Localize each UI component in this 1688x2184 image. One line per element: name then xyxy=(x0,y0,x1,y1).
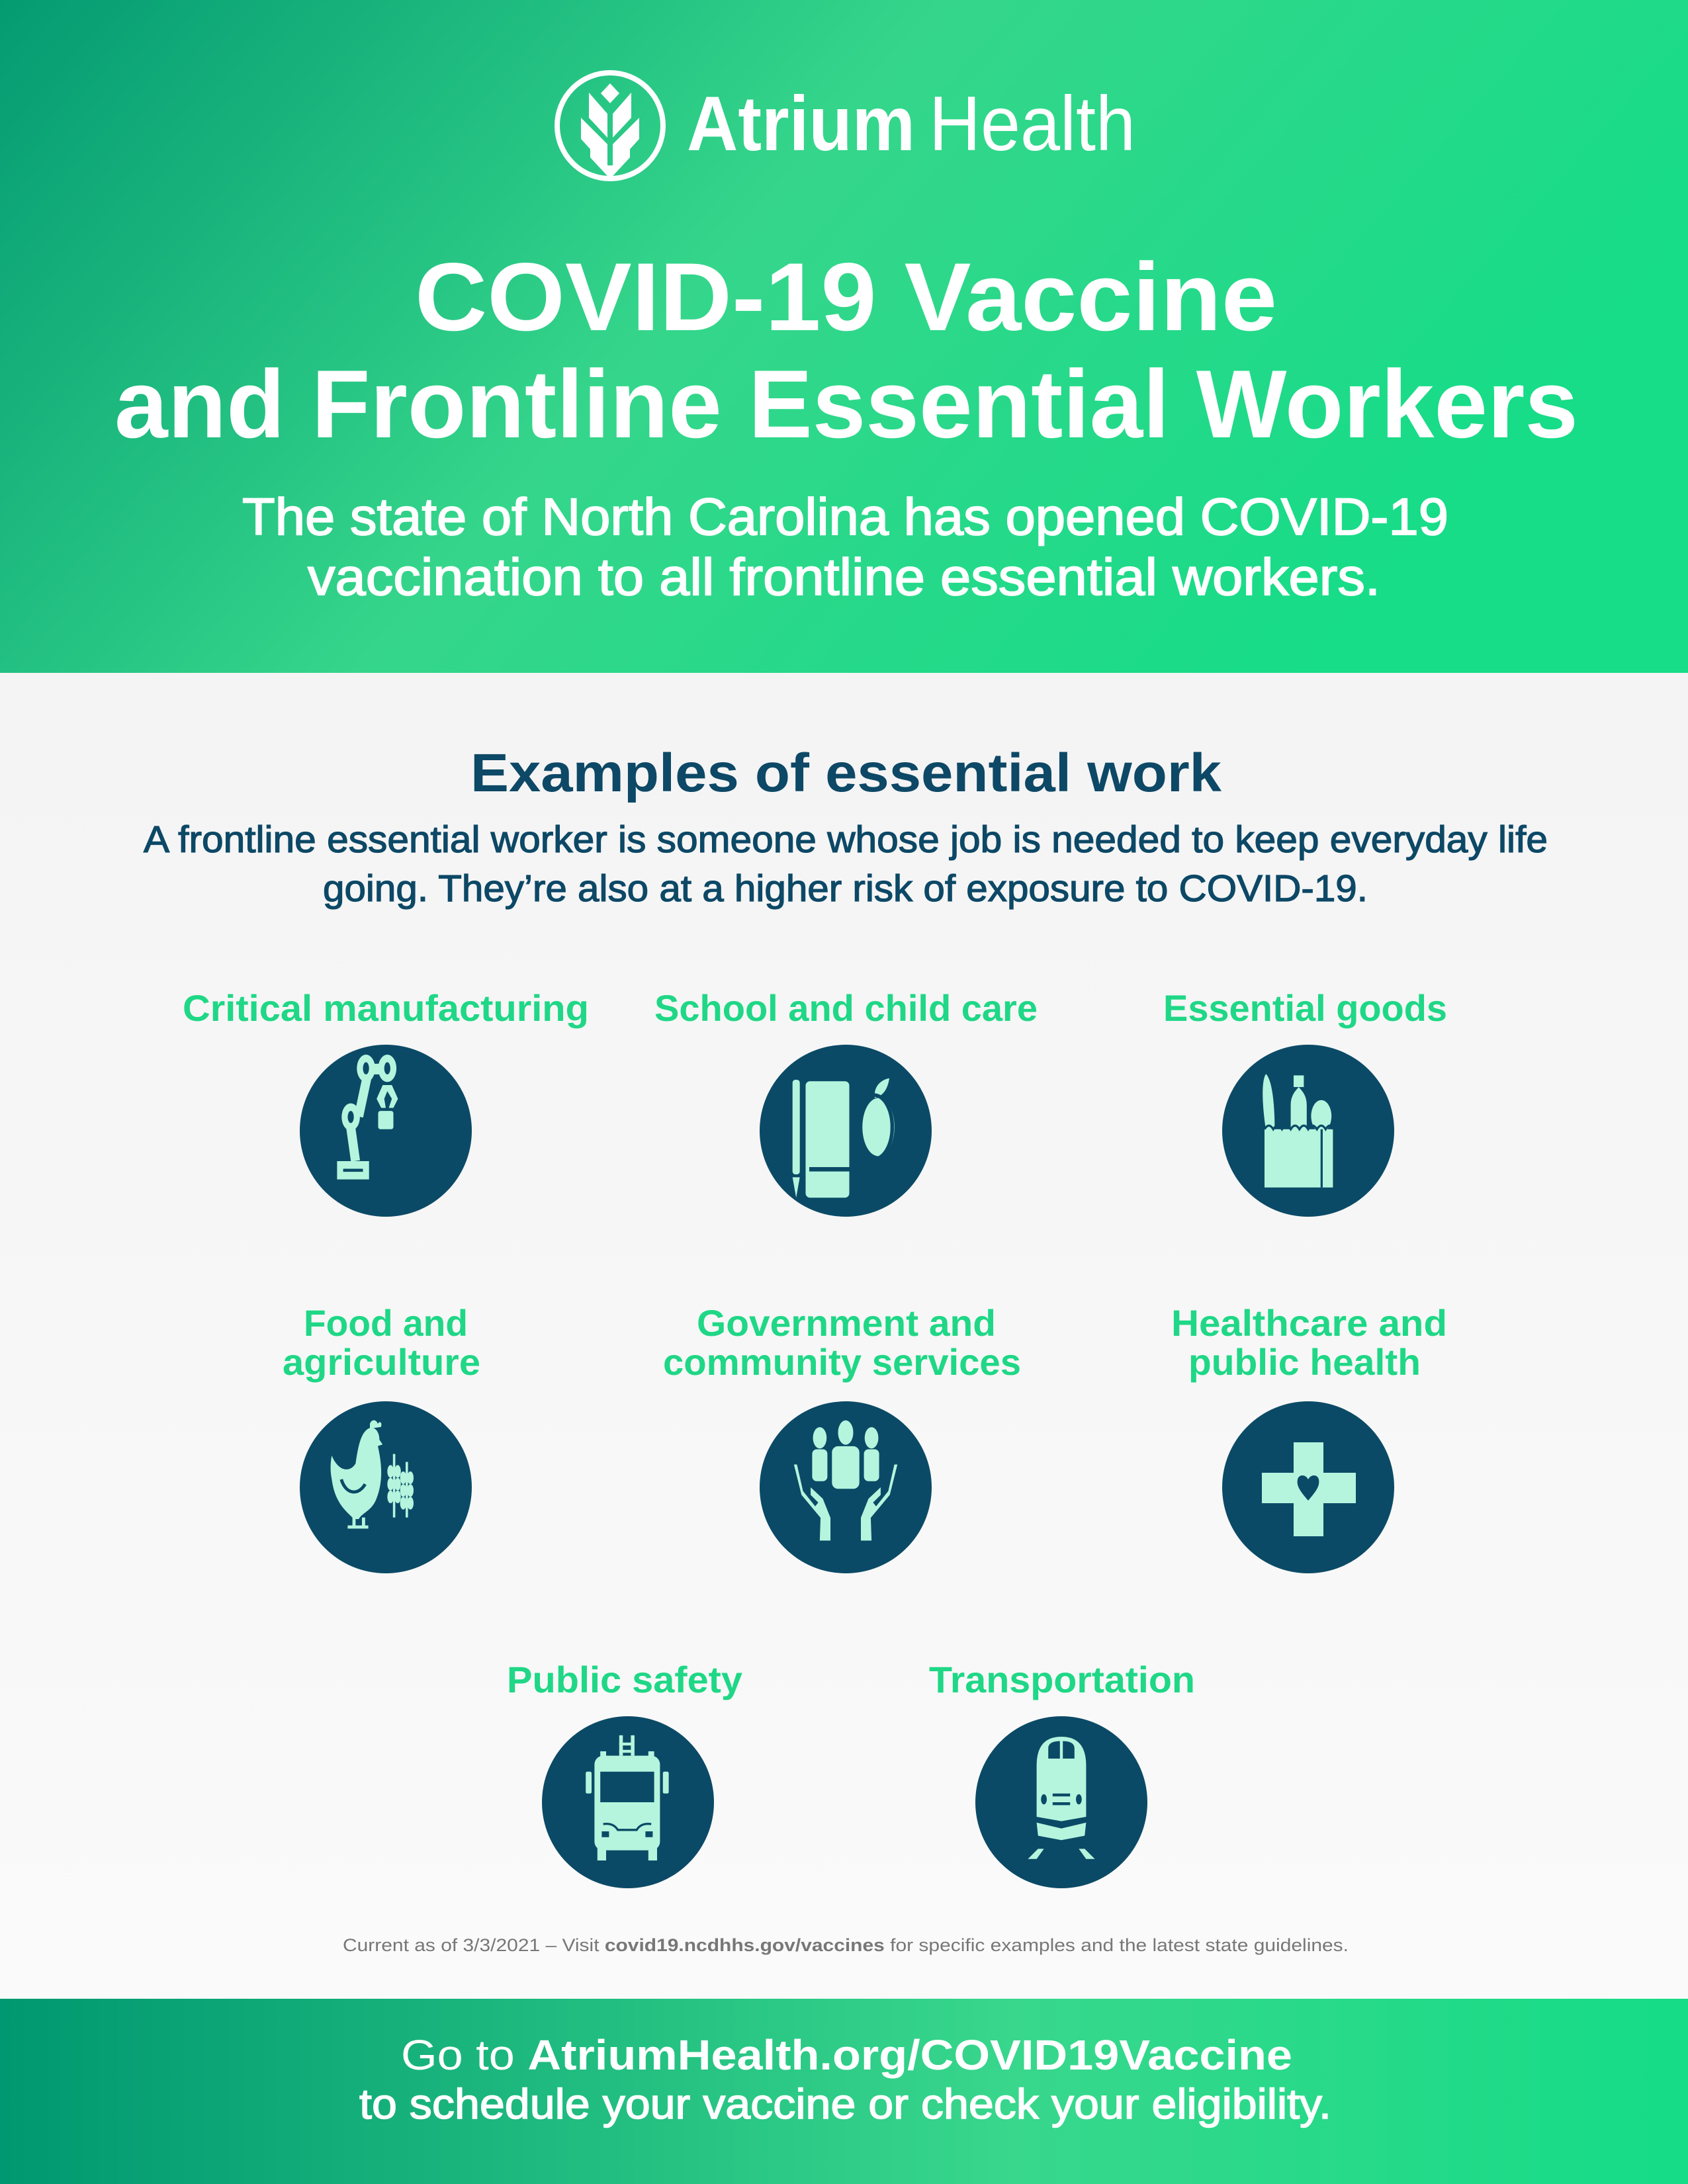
category labels: public health xyxy=(1188,1341,1421,1383)
category labels: Essential goods xyxy=(1163,987,1447,1029)
category labels: agriculture xyxy=(283,1341,480,1383)
icon: book pencil apple xyxy=(760,1045,932,1217)
category labels: Public safety xyxy=(507,1659,742,1700)
footer call to action: to schedule your vaccine or check your eligibility. xyxy=(359,2080,1331,2128)
category labels: Critical manufacturing xyxy=(183,987,589,1029)
category labels xyxy=(183,987,1447,1700)
subtitle: vaccination to all frontline essential workers. xyxy=(308,547,1380,606)
category labels: Transportation xyxy=(929,1659,1195,1700)
title xyxy=(114,243,1578,458)
footer band xyxy=(0,1999,1688,2184)
logo xyxy=(557,73,1135,179)
icon: train xyxy=(975,1716,1147,1888)
icon: chicken and wheat xyxy=(300,1401,472,1573)
logo wordmark: Atrium xyxy=(687,80,915,167)
icon: grocery bag xyxy=(1222,1045,1394,1217)
intro text: going. They’re also at a higher risk of exposure to COVID-19. xyxy=(323,867,1368,910)
logo: Health xyxy=(929,80,1135,167)
subtitle xyxy=(242,487,1448,606)
title: COVID-19 Vaccine xyxy=(415,243,1277,351)
icon: fire truck xyxy=(542,1716,714,1888)
intro text xyxy=(144,818,1548,910)
footer call to action: Go to AtriumHealth.org/COVID19Vaccine xyxy=(401,2031,1292,2079)
icon: logo leaf xyxy=(557,73,663,179)
icon: hands holding people xyxy=(760,1401,932,1573)
category labels: Food and xyxy=(304,1302,468,1344)
section heading: Examples of essential work xyxy=(470,743,1222,803)
footer call to action xyxy=(359,2031,1331,2128)
footnote: Current as of 3/3/2021 – Visit covid19.ncdhhs.gov/vaccines for specific examples and the latest state guidelines. xyxy=(343,1935,1349,1955)
header band xyxy=(0,0,1688,673)
icon: robot arm xyxy=(300,1045,472,1217)
icon: medical cross with heart xyxy=(1222,1401,1394,1573)
intro text: A frontline essential worker is someone whose job is needed to keep everyday life xyxy=(144,818,1548,861)
category labels: community services xyxy=(663,1341,1021,1383)
category labels: School and child care xyxy=(654,987,1038,1029)
subtitle: The state of North Carolina has opened COVID-19 xyxy=(242,487,1448,546)
category labels: Government and xyxy=(697,1302,996,1344)
category labels: Healthcare and xyxy=(1171,1302,1447,1344)
title: and Frontline Essential Workers xyxy=(114,350,1578,458)
